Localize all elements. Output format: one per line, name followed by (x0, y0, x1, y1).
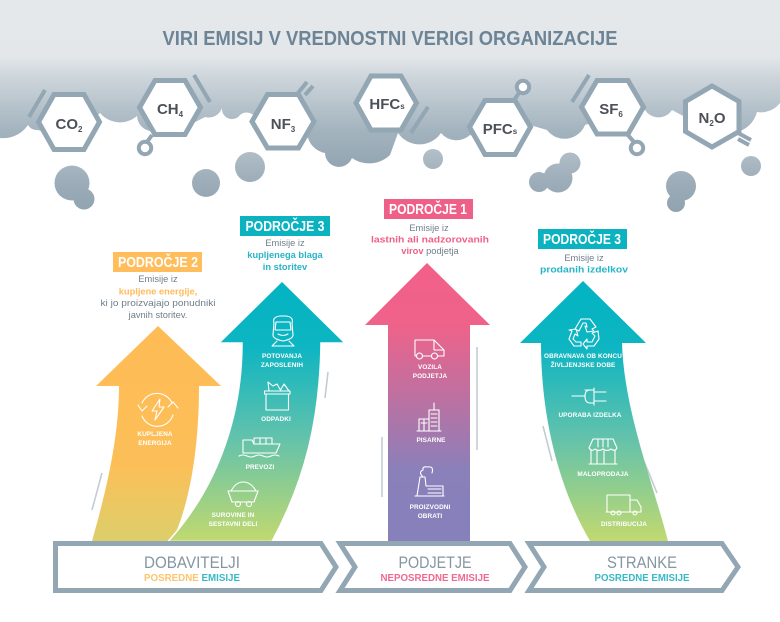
chevron: company: NEPOSREDNE EMISIJE (380, 573, 490, 584)
label: purchased energy: KUPLJENA (137, 431, 173, 438)
molecule: CO2 (29, 90, 100, 150)
molecule: CO2: CO (56, 116, 78, 133)
label block: scope 2: ki jo proizvajajo ponudniki (100, 298, 216, 308)
label block: scope 3 upstream: PODROČJE 3 (246, 217, 324, 235)
label block: scope 3 upstream: Emisije iz (265, 238, 305, 248)
molecule: PFCs (470, 81, 530, 154)
molecule: N2O: N (699, 110, 709, 127)
title: VIRI EMISIJ V VREDNOSTNI VERIGI ORGANIZACIJE (162, 27, 618, 50)
icon: offices (417, 403, 441, 431)
background cloud (0, 0, 780, 167)
chevron: company (340, 544, 525, 590)
label block: scope 2: javnih storitev. (128, 310, 187, 320)
label: production plants: OBRATI (418, 513, 442, 520)
chevron: suppliers (56, 544, 336, 590)
chevron: customers: POSREDNE EMISIJE (594, 573, 690, 584)
icon: factory (415, 467, 444, 496)
label: retail: MALOPRODAJA (577, 471, 629, 478)
decorative droplets (54, 149, 761, 212)
label: company vehicles: VOZILA (418, 364, 442, 371)
icon: ore cart (228, 482, 258, 506)
molecule: SF6 (572, 75, 644, 154)
label: raw materials: SUROVINE IN (212, 512, 254, 519)
molecule: HFCs (356, 76, 428, 133)
icon: van (415, 340, 444, 359)
molecule: CH4: 4 (179, 110, 184, 119)
label: waste: ODPADKI (261, 416, 291, 423)
icon: recycling (569, 319, 599, 349)
label block: scope 3 downstream (538, 229, 629, 274)
arrow: scope 3 downstream (520, 281, 668, 541)
chevron: company: PODJETJE (398, 554, 472, 572)
label: employee travel: ZAPOSLENIH (261, 362, 303, 369)
icon: purchased energy (138, 393, 178, 426)
label block: scope 2: Emisije iz (138, 274, 178, 284)
label: end of life: ŽIVLJENJSKE DOBE (551, 360, 616, 369)
label block: scope 1: PODROČJE 1 (389, 200, 467, 218)
chevron: customers (529, 544, 738, 590)
molecule: CH4: CH (157, 101, 179, 118)
label block: scope 3 upstream: kupljenega blaga (247, 250, 324, 260)
label block: scope 3 upstream: in storitev (263, 262, 308, 272)
decorative lines (92, 347, 657, 510)
label: transport: PREVOZI (246, 464, 274, 471)
molecule: HFCs: HFCs (369, 96, 405, 113)
label block: scope 1: lastnih ali nadzorovanih (371, 234, 489, 244)
molecule: N2O (686, 86, 751, 147)
chevron: customers: STRANKE (607, 554, 677, 572)
label: company vehicles: PODJETJA (413, 373, 448, 380)
label: product use: UPORABA IZDELKA (558, 412, 622, 419)
label: raw materials: SESTAVNI DELI (209, 521, 257, 528)
molecule: N2O: O (714, 110, 726, 127)
label block: scope 3 downstream: Emisije iz (564, 253, 604, 263)
icon: waste (264, 382, 290, 410)
icon: truck (606, 495, 641, 515)
molecule: CO2: 2 (78, 125, 83, 134)
label block: scope 3 upstream (240, 216, 330, 272)
label block: scope 1: Emisije iz (409, 223, 449, 233)
label block: scope 2: PODROČJE 2 (118, 253, 198, 271)
label: purchased energy: ENERGIJA (138, 440, 172, 447)
label block: scope 2 (100, 252, 216, 320)
label: end of life: OBRAVNAVA OB KONCU (544, 353, 622, 360)
molecule: NF3: 3 (291, 125, 296, 134)
label block: scope 1 (371, 199, 489, 256)
label: offices: PISARNE (416, 437, 446, 444)
chevron: suppliers: POSREDNE EMISIJE (144, 573, 240, 584)
label: distribution: DISTRIBUCIJA (601, 521, 647, 528)
molecule: NF3: NF (271, 116, 291, 133)
icon: train (272, 316, 294, 346)
label block: scope 1: virov podjetja (401, 246, 460, 256)
molecule: NF3 (252, 82, 314, 148)
molecule: SF6: SF (599, 101, 618, 118)
label block: scope 3 downstream: prodanih izdelkov (540, 264, 629, 274)
molecule: CH4 (139, 75, 210, 154)
molecule: N2O: 2 (709, 119, 714, 128)
label: employee travel: POTOVANJA (262, 353, 302, 360)
molecule: SF6: 6 (618, 110, 623, 119)
chevron: suppliers: DOBAVITELJI (144, 554, 240, 572)
molecule: PFCs: PFCs (483, 121, 518, 138)
label: production plants: PROIZVODNI (410, 504, 450, 511)
label block: scope 2: kupljene energije, (119, 286, 197, 296)
icon: shop (589, 439, 617, 464)
icon: plug (572, 388, 606, 405)
icon: ship (239, 438, 280, 457)
label block: scope 3 downstream: PODROČJE 3 (543, 230, 621, 248)
arrow: scope 1 (365, 263, 490, 541)
arrow: scope 2 (92, 326, 221, 541)
arrow: scope 3 upstream (168, 281, 345, 542)
